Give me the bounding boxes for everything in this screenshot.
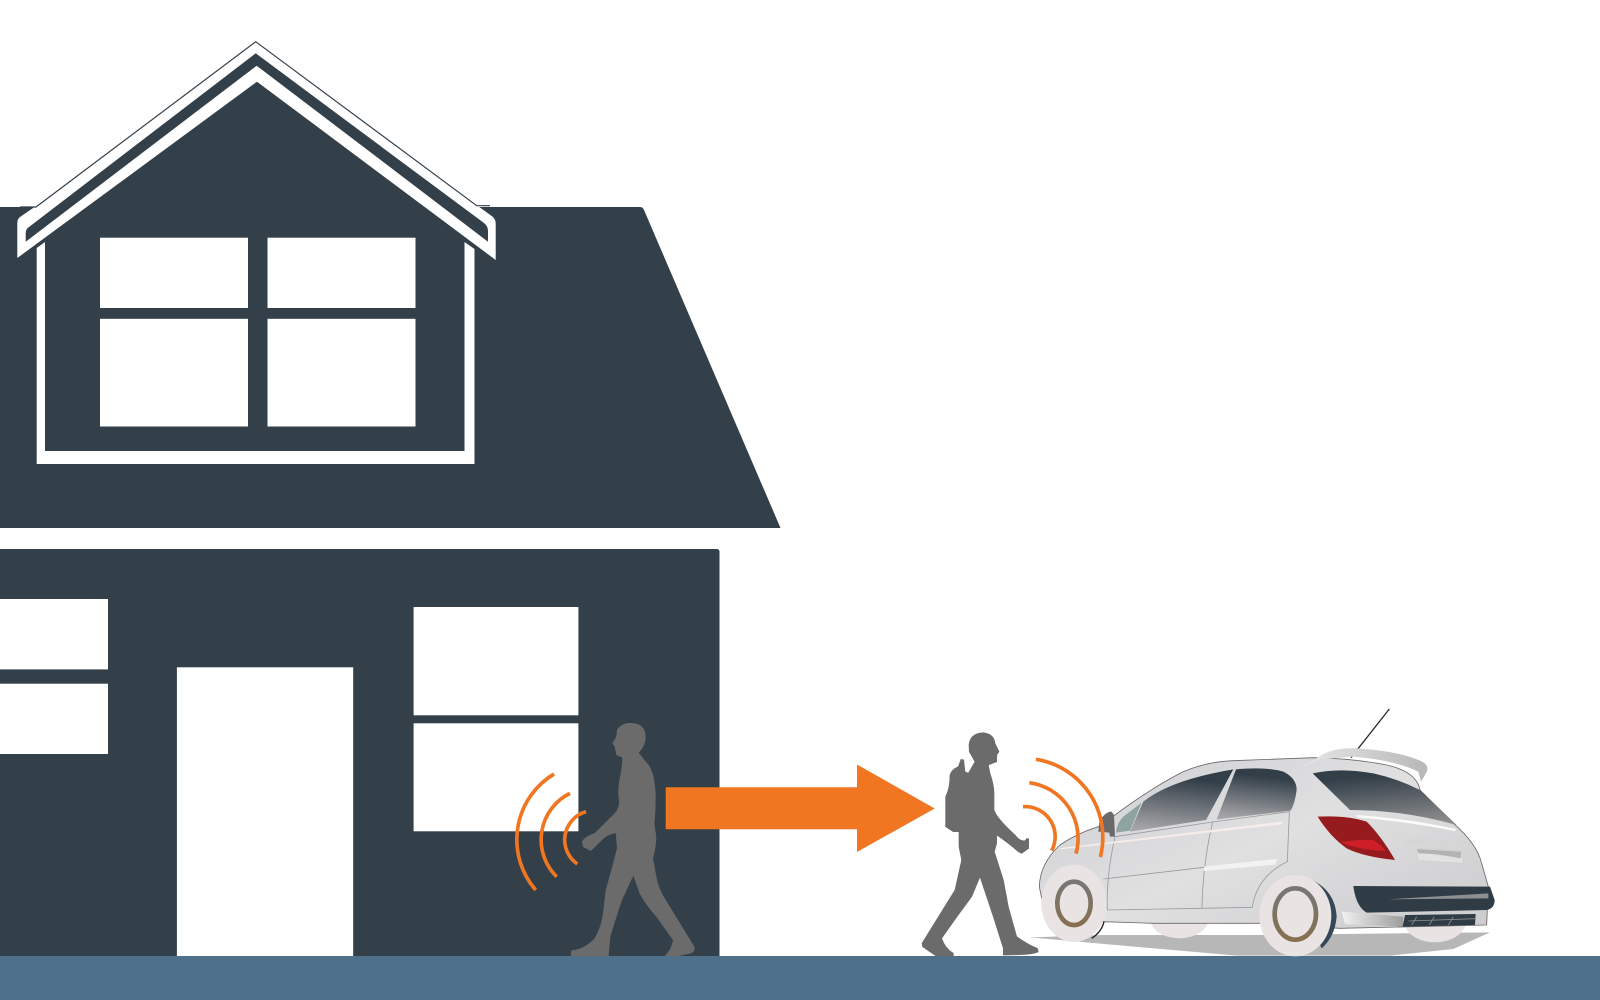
bumper highlight	[1388, 893, 1488, 899]
far wheels	[1150, 898, 1466, 942]
antenna	[1351, 709, 1389, 758]
dormer frame	[37, 242, 474, 464]
dormer gable outer roof trim	[17, 42, 496, 260]
person at car	[922, 733, 1038, 956]
car	[1023, 709, 1495, 956]
rear highlight stripe	[1357, 815, 1456, 831]
tail light inner	[1341, 840, 1386, 851]
spoiler	[1300, 748, 1427, 782]
front wheel	[1041, 865, 1107, 942]
rear bumper	[1353, 886, 1495, 913]
silhouette	[571, 723, 694, 956]
mirror	[1098, 812, 1115, 837]
lower storey wall	[0, 549, 720, 957]
side trim strips	[1060, 822, 1282, 871]
person leaving house	[517, 723, 694, 956]
rear wheel	[1259, 875, 1337, 956]
left window	[0, 599, 108, 754]
rear side window	[1217, 768, 1297, 819]
dormer window	[100, 238, 416, 426]
side window small	[1116, 803, 1142, 833]
roof trim outline	[20, 42, 490, 207]
front side window	[1130, 769, 1233, 832]
dormer roof dark stripe	[26, 53, 488, 242]
main roof	[0, 207, 780, 528]
gable fill	[22, 75, 490, 300]
arrow	[666, 764, 935, 852]
ground shadow	[1030, 932, 1490, 956]
house	[0, 42, 780, 957]
rear windscreen	[1313, 770, 1457, 825]
ground	[0, 956, 1600, 1000]
signal arcs	[517, 774, 586, 890]
right window	[414, 607, 578, 831]
tailgate handle and plate	[1404, 838, 1466, 863]
lower sill	[1342, 912, 1403, 927]
grille	[1403, 914, 1476, 927]
silhouette with backpack	[922, 733, 1038, 956]
car body	[1039, 758, 1488, 928]
tail light	[1318, 816, 1395, 860]
signal arcs	[1023, 759, 1103, 857]
door	[177, 667, 353, 957]
door lines	[1103, 812, 1289, 910]
